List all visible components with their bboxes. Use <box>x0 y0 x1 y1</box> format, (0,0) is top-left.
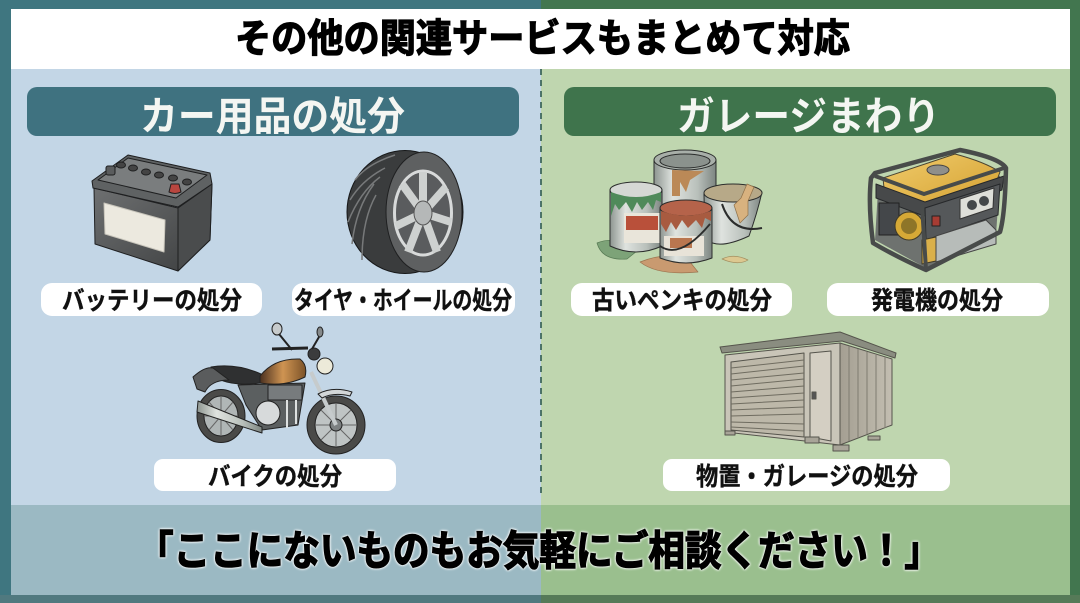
label: battery: バッテリーの処分 <box>62 287 242 315</box>
center dashed divider <box>540 69 542 495</box>
heading: garage <box>564 87 1056 139</box>
background: left bottom frame <box>0 595 541 603</box>
bottom message: 「ここにないものもお気軽にご相談ください！」 <box>137 528 941 574</box>
title text: その他の関連サービスもまとめて対応 <box>235 18 850 61</box>
label: motorcycle: バイクの処分 <box>208 463 342 491</box>
background: right bottom frame <box>541 595 1080 603</box>
panel: garage background <box>541 69 1070 505</box>
label: paint: 古いペンキの処分 <box>592 287 772 315</box>
label: shed and garage: 物置・ガレージの処分 <box>696 463 918 491</box>
wheel spokes <box>396 172 451 252</box>
background: right frame <box>541 0 1080 603</box>
icon: car battery <box>92 155 212 271</box>
label: tire and wheel: タイヤ・ホイールの処分 <box>294 287 512 315</box>
heading: garage: ガレージまわり <box>677 95 940 139</box>
label: motorcycle <box>154 459 396 491</box>
icon: paint cans <box>597 150 762 273</box>
heading: car goods: カー用品の処分 <box>140 95 405 139</box>
icon: motorcycle <box>193 323 365 454</box>
icon: generator <box>870 150 1006 270</box>
background: left frame <box>0 0 541 603</box>
heading: car goods <box>27 87 519 139</box>
icon: storage shed <box>720 332 896 451</box>
panel: car goods background <box>11 69 541 505</box>
label: generator <box>827 283 1049 316</box>
label: generator: 発電機の処分 <box>871 287 1003 315</box>
icon: tire and wheel <box>347 150 463 274</box>
label: tire and wheel <box>292 283 515 316</box>
bottom band: left <box>11 505 541 595</box>
shutter slats <box>731 360 804 431</box>
bottom band: right <box>541 505 1070 595</box>
title band <box>11 9 1070 69</box>
